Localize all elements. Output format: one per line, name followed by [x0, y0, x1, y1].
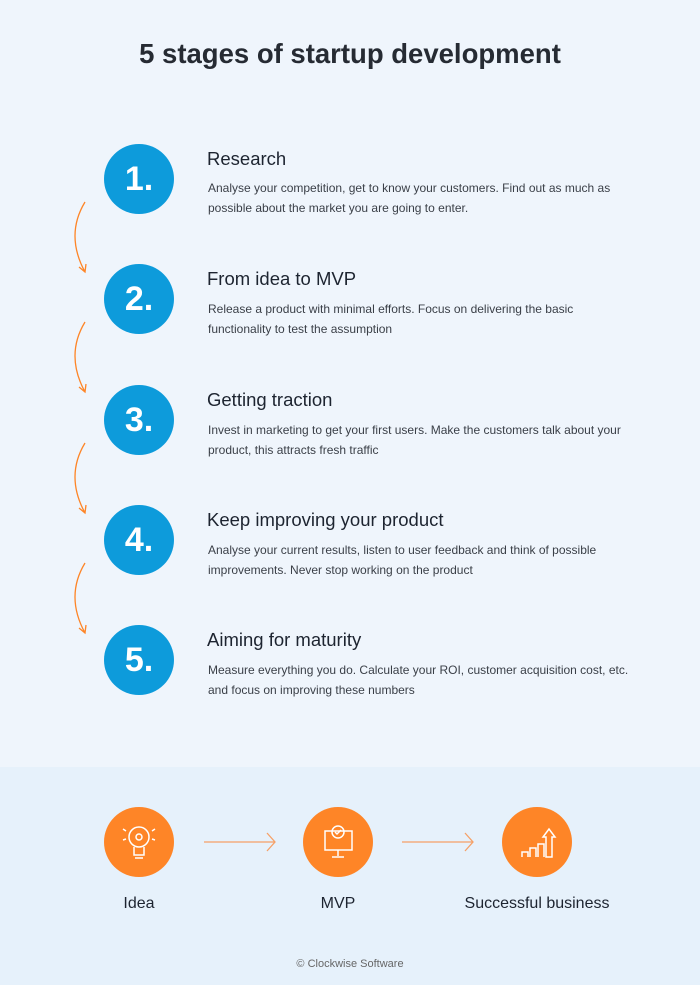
title: 5 stages of startup development	[139, 38, 561, 69]
label idea: Idea	[123, 895, 155, 912]
stage 5 circle	[104, 625, 174, 695]
stage 2 circle: 2.	[125, 280, 153, 318]
label MVP: MVP	[321, 895, 355, 912]
copyright: © Clockwise Software	[296, 958, 404, 970]
stage 5 title: Aiming for maturity	[207, 629, 361, 650]
stage 1 text: Analyse your competition, get to know your customers. Find out as much as possible about the market you are going to enter.	[208, 181, 610, 215]
icon: idea	[104, 807, 174, 877]
stage 3 circle	[104, 385, 174, 455]
arrow 2	[402, 832, 474, 852]
arrow 1	[204, 832, 276, 852]
bottom band	[0, 767, 700, 985]
stage 5 circle: 5.	[125, 641, 153, 679]
stage 4 circle: 4.	[125, 521, 153, 559]
stage 4 text: Analyse your current results, listen to user feedback and think of possible improvements. Never stop working on the product	[208, 543, 596, 577]
stage 1 title: Research	[207, 148, 286, 169]
curved arrows	[74, 202, 87, 634]
stage 3 text: Invest in marketing to get your first users. Make the customers talk about your product, this attracts fresh traffic	[208, 423, 621, 457]
icon: MVP	[303, 807, 373, 877]
label successful business: Successful business	[465, 895, 609, 912]
stage 2 text: Release a product with minimal efforts. Focus on delivering the basic functionality to test the assumption	[208, 302, 573, 336]
stage 1 circle: 1.	[125, 160, 153, 198]
stage 3 circle: 3.	[125, 401, 153, 439]
stage 2 title: From idea to MVP	[207, 268, 356, 289]
stage 3 title: Getting traction	[207, 389, 332, 410]
stage 4 circle	[104, 505, 174, 575]
stage 1 circle	[104, 144, 174, 214]
stage 4 title: Keep improving your product	[207, 509, 444, 530]
stage 5 text: Measure everything you do. Calculate your ROI, customer acquisition cost, etc. and focus on improving these numbers	[208, 663, 628, 697]
stage 2 circle	[104, 264, 174, 334]
icon: growth	[502, 807, 572, 877]
